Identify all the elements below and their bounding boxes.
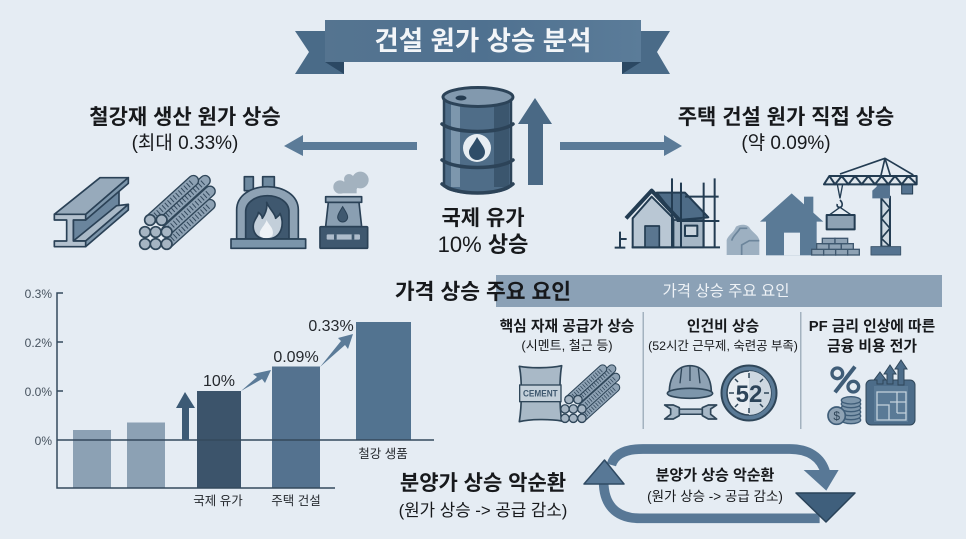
arrow: oil to housing <box>241 370 271 391</box>
divider <box>800 312 802 429</box>
factor: materials <box>500 318 634 422</box>
icon: house with scaffolding <box>615 178 720 248</box>
oil price label: 10% 상승 <box>438 232 528 257</box>
bars <box>73 322 411 488</box>
factor: PF interest: 금융 비용 전가 <box>827 338 917 355</box>
blue house silhouette <box>760 193 823 255</box>
brick stack <box>812 238 859 255</box>
value labels: 0.33% <box>308 318 354 335</box>
icon: refinery with smoke <box>320 172 369 248</box>
icon: helmet and wrench <box>665 366 717 419</box>
left heading: steel cost: 철강재 생산 원가 상승 <box>89 106 281 129</box>
category labels <box>193 447 408 508</box>
left heading: steel cost <box>89 106 281 154</box>
right heading: housing cost <box>678 106 894 154</box>
cycle diagram <box>584 449 855 522</box>
category labels: 국제 유가 <box>193 494 243 508</box>
icon: I-beam <box>54 178 128 247</box>
value labels <box>203 318 354 390</box>
arrow: to housing <box>560 135 682 156</box>
category labels: 철강 생품 <box>358 447 408 461</box>
section heading: price factors: 가격 상승 주요 요인 <box>395 280 571 304</box>
icon: cement bag: CEMENT <box>523 389 558 399</box>
arrow: housing to steel <box>320 334 353 367</box>
triangle: right <box>796 493 855 522</box>
icon: rebar bundle <box>140 181 210 249</box>
triangle: left <box>584 460 624 484</box>
vicious cycle heading: 분양가 상승 악순환 <box>400 472 566 495</box>
right heading: housing cost: (약 0.09%) <box>741 132 831 154</box>
axis labels: 0.2% <box>25 336 52 350</box>
icon: blueprint with rising arrows <box>866 360 915 425</box>
icon: percent and coins: $ <box>833 409 840 423</box>
tower crane <box>824 158 917 255</box>
factor: PF interest <box>809 318 935 425</box>
oil price label <box>438 207 528 257</box>
icon: 52-hour clock <box>722 366 776 420</box>
cycle text <box>647 467 783 504</box>
icon: material pile <box>727 225 759 255</box>
icon: furnace <box>231 177 306 248</box>
oil price label: 국제 유가 <box>441 207 525 230</box>
axis labels: 0.3% <box>25 287 52 301</box>
factor: materials: 핵심 자재 공급가 상승 <box>500 318 634 335</box>
factor: materials: (시멘트, 철근 등) <box>521 338 613 353</box>
factor band <box>496 275 942 307</box>
divider <box>642 312 644 429</box>
icon: 52-hour clock: 52 <box>736 381 762 408</box>
title banner <box>295 20 670 74</box>
factor: labor: (52시간 근무제, 숙련공 부족) <box>648 339 798 353</box>
axis labels: 0.0% <box>25 385 52 399</box>
arrow: to steel <box>284 135 417 156</box>
bar chart <box>25 287 434 508</box>
icon: blue house, bricks and tower crane <box>760 158 917 255</box>
vicious cycle heading <box>399 472 567 520</box>
cycle arrow: bottom <box>604 482 820 518</box>
factor band: 가격 상승 주요 요인 <box>662 282 790 300</box>
axes <box>57 293 434 488</box>
factor: labor <box>648 318 798 420</box>
arrow: oil price up <box>518 98 552 185</box>
left heading: steel cost: (최대 0.33%) <box>132 132 238 154</box>
factor: labor: 인건비 상승 <box>687 318 759 335</box>
factor: PF interest: PF 금리 인상에 따른 <box>809 318 935 335</box>
arrow: rise <box>176 392 195 440</box>
icon: rebar <box>561 369 616 422</box>
category labels: 주택 건설 <box>271 494 321 508</box>
vicious cycle heading: (원가 상승 -> 공급 감소) <box>399 501 567 520</box>
cycle text: 분양가 상승 악순환 <box>656 467 775 484</box>
title banner: 건설 원가 상승 분석 <box>374 26 592 56</box>
icon: oil barrel <box>442 88 513 193</box>
right heading: housing cost: 주택 건설 원가 직접 상승 <box>678 106 894 129</box>
cycle arrow: top <box>611 449 839 491</box>
cycle text: (원가 상승 -> 공급 감소) <box>647 489 783 504</box>
axis labels <box>25 287 52 448</box>
value labels: 10% <box>203 373 235 390</box>
axis labels: 0% <box>35 434 52 448</box>
value labels: 0.09% <box>273 349 319 366</box>
